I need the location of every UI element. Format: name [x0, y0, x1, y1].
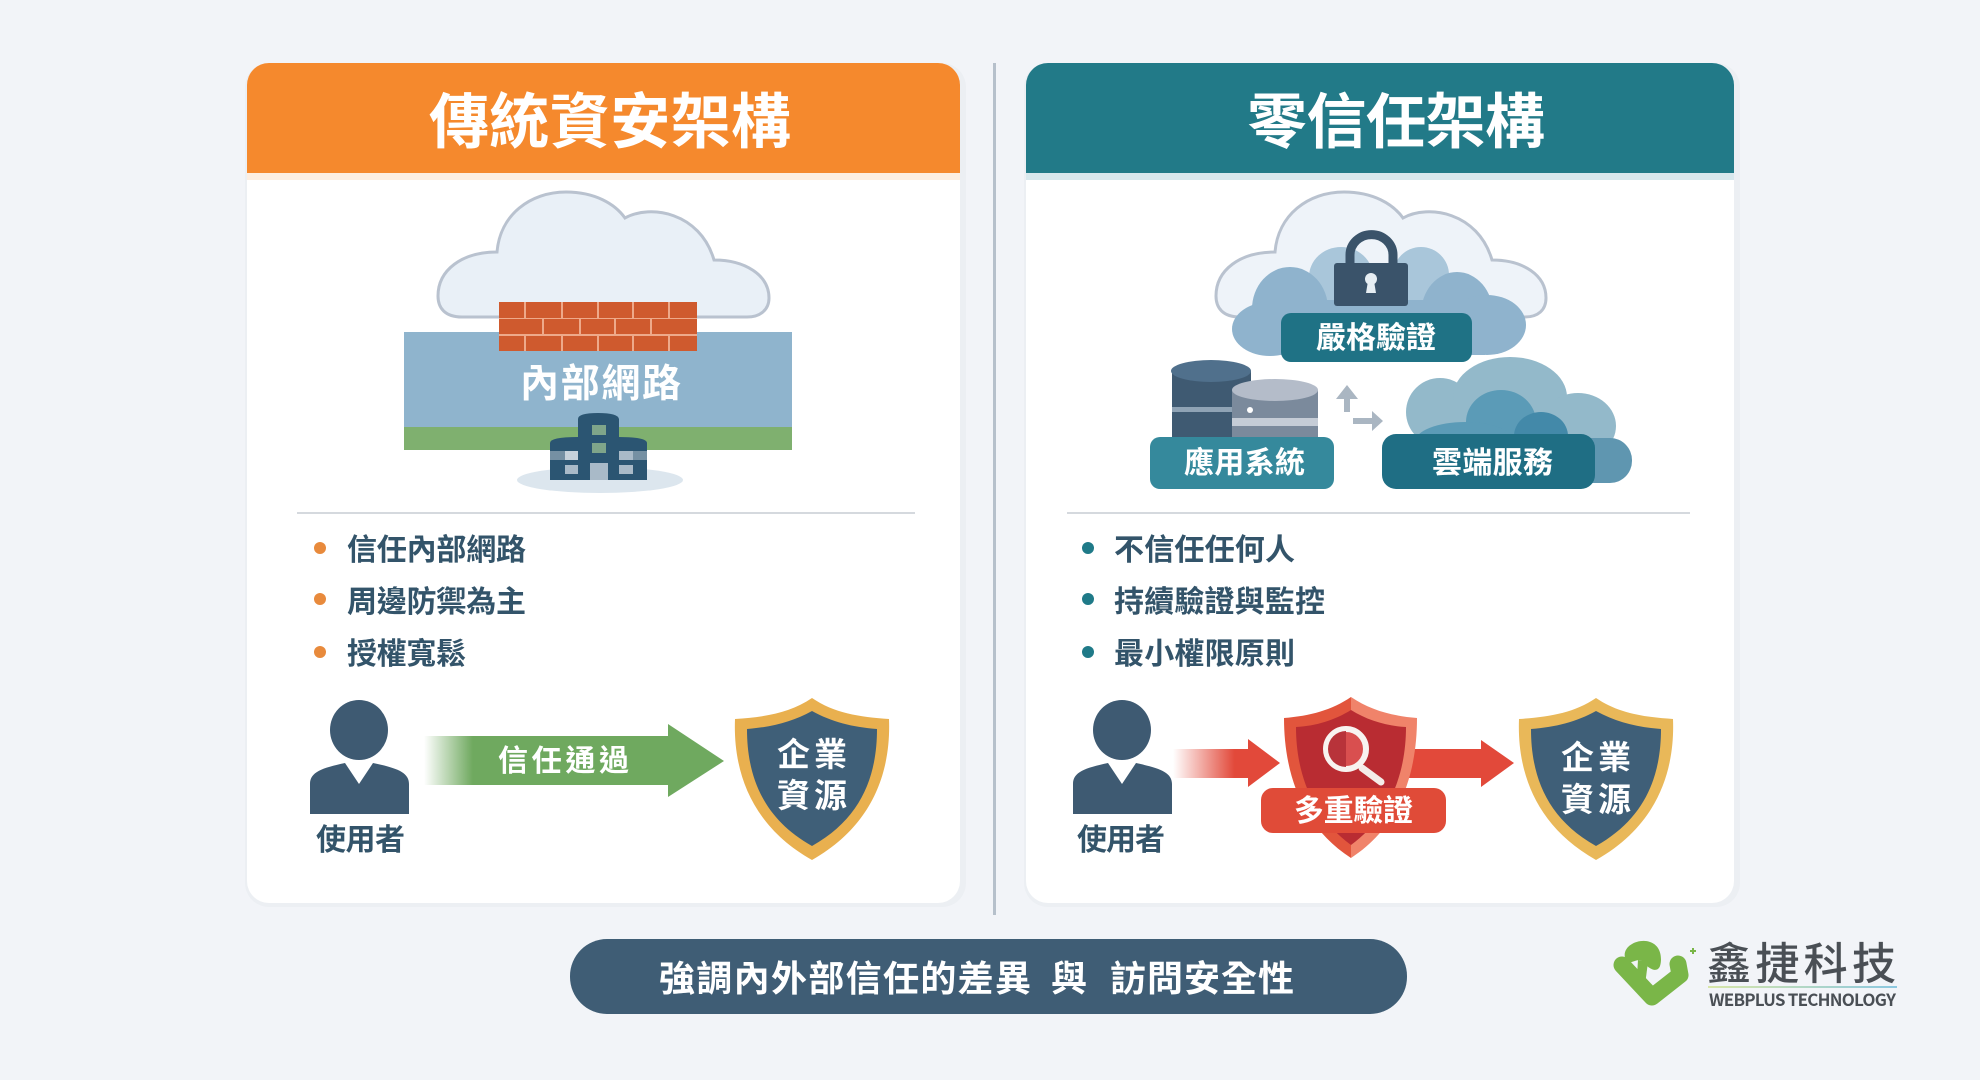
list: zero trust traits: 不信任任何人 — [1114, 534, 1295, 567]
icon: user — [310, 700, 409, 857]
list: zero trust traits — [1082, 534, 1325, 671]
panel: traditional security — [245, 63, 966, 907]
list: zero trust traits: 最小權限原則 — [1114, 638, 1295, 671]
label: cloud services: 雲端服務 — [1432, 447, 1553, 480]
icon: user: 使用者 — [316, 824, 405, 857]
icon: shield enterprise resources: 企業 — [777, 736, 847, 773]
icon: brick firewall — [499, 302, 697, 351]
logo: WebPlus Technology — [1622, 940, 1897, 1011]
footer callout pill — [570, 939, 1407, 1014]
arrow: trust pass — [424, 724, 724, 797]
icon: user: 使用者 — [1077, 824, 1165, 857]
illustration: perimeter network — [404, 192, 792, 493]
icon: logo mark — [1622, 941, 1696, 997]
label: strict verification: 嚴格驗證 — [1316, 322, 1436, 355]
list: traditional traits: 周邊防禦為主 — [347, 586, 526, 619]
center divider — [993, 63, 996, 915]
label: application systems: 應用系統 — [1184, 447, 1305, 480]
header: zero trust — [1026, 63, 1734, 180]
icon: user — [1073, 700, 1172, 857]
footer callout pill: 與 — [1051, 958, 1087, 999]
logo: WebPlus Technology: WEBPLUS TECHNOLOGY — [1709, 986, 1896, 1011]
illustration: strict verification cloud — [1216, 192, 1546, 362]
arrows: data flow — [1336, 385, 1383, 431]
arrow: trust pass: 信任通過 — [498, 745, 629, 778]
header: zero trust: 零信任架構 — [1247, 89, 1545, 156]
icon: shield enterprise resources — [735, 698, 889, 860]
icon: shield enterprise resources: 企業 — [1561, 739, 1631, 776]
icon: multi-factor shield — [1261, 697, 1446, 858]
icon: padlock — [1334, 235, 1408, 306]
footer callout pill: 訪問安全性 — [1110, 958, 1294, 999]
icon: building — [517, 413, 683, 493]
list: traditional traits: 信任內部網路 — [347, 534, 526, 567]
list: zero trust traits: 持續驗證與監控 — [1114, 586, 1325, 619]
arrow: user to verification — [1173, 739, 1280, 787]
label: multi-factor verification — [1261, 788, 1446, 833]
label: multi-factor verification: 多重驗證 — [1294, 795, 1413, 828]
icon: shield enterprise resources — [1519, 698, 1673, 860]
icon: magnifier — [1326, 729, 1381, 782]
logo: WebPlus Technology: 鑫捷科技 — [1707, 940, 1896, 989]
footer callout pill: 強調內外部信任的差異 — [659, 958, 1031, 999]
icon: shield enterprise resources: 資源 — [777, 777, 847, 814]
arrow: verification to resources — [1405, 740, 1514, 787]
illustration: perimeter network: 內部網路 — [520, 363, 681, 406]
panel: zero trust — [1024, 63, 1740, 907]
label: strict verification — [1281, 313, 1472, 362]
header: traditional: 傳統資安架構 — [429, 89, 791, 156]
icon: shield enterprise resources: 資源 — [1561, 781, 1631, 818]
header: traditional — [247, 63, 960, 180]
label: cloud services — [1382, 434, 1595, 489]
list: traditional traits: 授權寬鬆 — [347, 638, 466, 671]
illustration: application databases — [1150, 360, 1334, 489]
list: traditional traits — [314, 534, 526, 671]
label: application systems — [1150, 437, 1334, 489]
illustration: cloud services — [1382, 357, 1632, 489]
